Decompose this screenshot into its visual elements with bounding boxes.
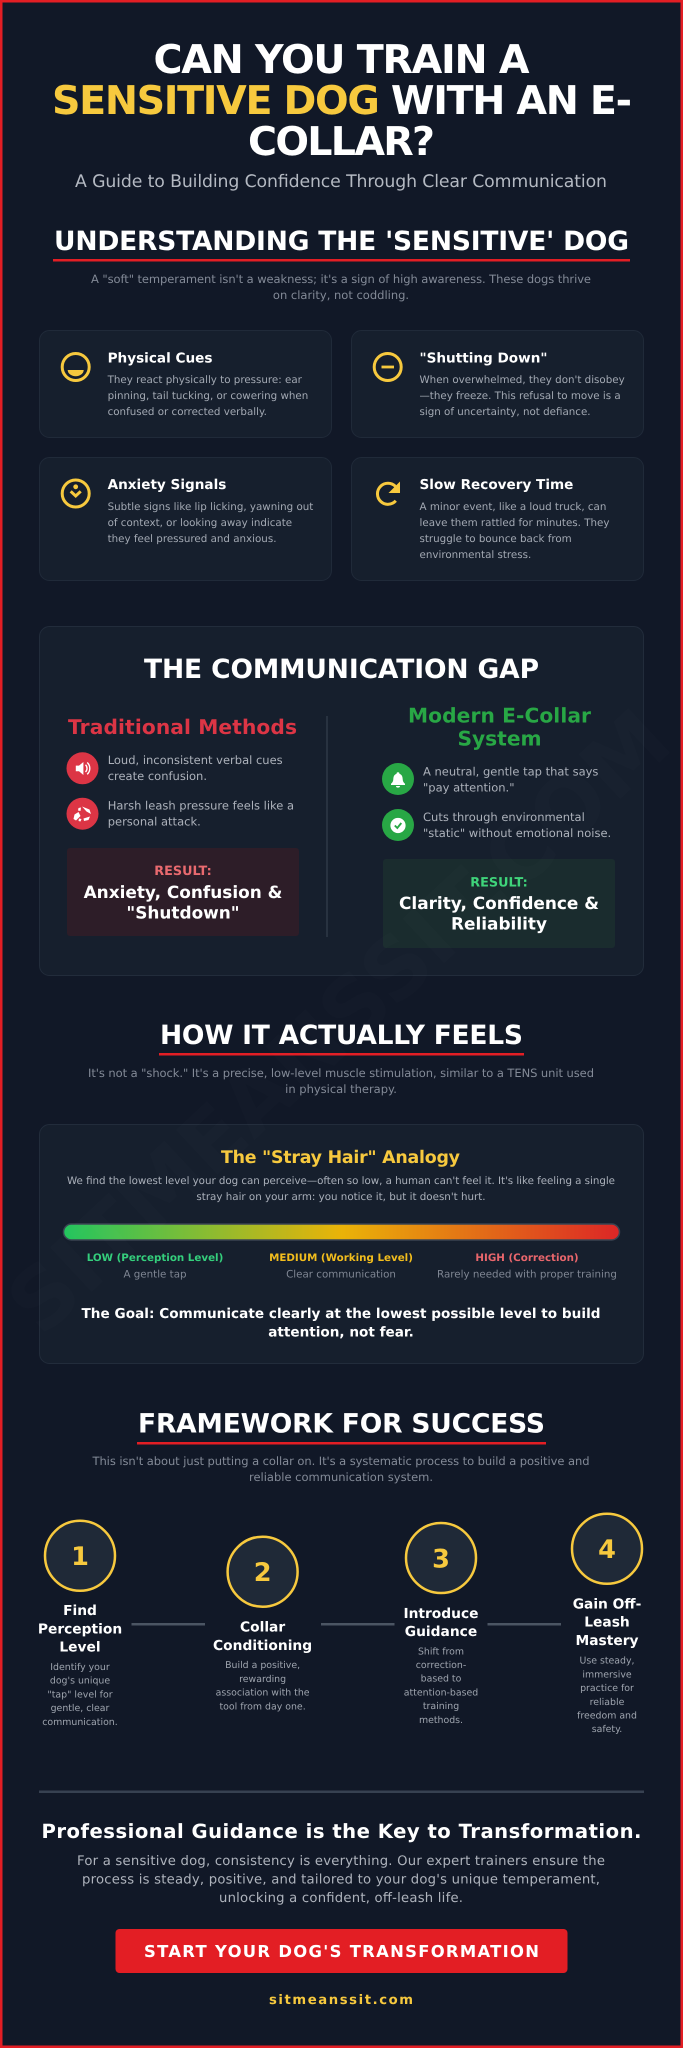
item text: create confusion. <box>108 769 207 783</box>
step heading <box>403 1606 479 1640</box>
section intro: understanding <box>91 272 591 302</box>
item text: "pay attention." <box>423 780 515 794</box>
icon: speaker <box>66 752 98 784</box>
card: shutting down <box>352 330 644 438</box>
card text: of context, or looking away indicate <box>108 517 292 529</box>
item text: "static" without emotional noise. <box>423 826 611 840</box>
connector 2 to 3 <box>321 1623 394 1626</box>
item text: personal attack. <box>108 814 201 828</box>
step heading: Collar <box>240 1620 285 1636</box>
closing text <box>77 1854 605 1906</box>
section intro: understanding: on clarity, not coddling. <box>273 288 409 302</box>
step text <box>577 1656 637 1735</box>
step text: freedom and <box>577 1710 637 1722</box>
step heading: Leash <box>584 1615 630 1631</box>
closing text: process is steady, positive, and tailored to your dog's unique temperament, <box>82 1872 600 1888</box>
step heading: Guidance <box>405 1624 477 1640</box>
level: medium <box>269 1252 413 1280</box>
number badge <box>572 1514 642 1584</box>
result box: positive: Clarity, Confidence & <box>399 893 599 913</box>
title: COLLAR? <box>248 119 435 165</box>
connector 1 to 2 <box>132 1623 205 1626</box>
result box: negative: RESULT: <box>154 864 212 879</box>
level: high: HIGH (Correction) <box>475 1252 579 1264</box>
level: medium: Clear communication <box>286 1268 396 1280</box>
number badge <box>45 1521 115 1591</box>
column divider <box>326 716 328 937</box>
card text: sign of uncertainty, not defiance. <box>420 406 591 418</box>
step 3 <box>403 1523 479 1726</box>
number badge: 4 <box>598 1535 616 1565</box>
section intro: how it feels: in physical therapy. <box>285 1082 397 1096</box>
step heading: Find <box>63 1603 97 1619</box>
step text: practice for <box>580 1683 634 1694</box>
goal statement: The Goal: Communicate clearly at the lowest possible level to build <box>82 1306 600 1322</box>
card text <box>107 374 308 418</box>
call to action button <box>116 1929 568 1973</box>
step text: gentle, clear <box>51 1703 110 1714</box>
card text: struggle to bounce back from <box>420 533 572 545</box>
card text: they feel pressured and anxious. <box>108 533 276 545</box>
icon: circle with dot and chevron <box>62 480 89 507</box>
section intro: framework <box>92 1454 590 1484</box>
result box: negative <box>67 848 299 936</box>
step heading <box>38 1603 122 1656</box>
card text: pinning, tail tucking, or cowering when <box>108 390 308 402</box>
step heading: Level <box>59 1640 101 1656</box>
step text: Identify your <box>50 1662 110 1673</box>
card text <box>420 374 625 418</box>
step text: based to <box>421 1674 462 1685</box>
step text: dog's unique <box>50 1676 110 1687</box>
card text: environmental stress. <box>420 549 531 561</box>
step text: Use steady, <box>579 1656 635 1667</box>
step text: correction- <box>416 1660 466 1671</box>
level: low: LOW (Perception Level) <box>87 1252 223 1264</box>
column heading: Traditional Methods <box>68 715 297 739</box>
icon: check badge <box>382 809 414 841</box>
card text: Subtle signs like lip licking, yawning out <box>108 501 313 513</box>
panel text: We find the lowest level your dog can perceive—often so low, a human can't feel it. It's like feeling a single <box>67 1175 615 1187</box>
card heading: Slow Recovery Time <box>420 477 573 493</box>
goal statement <box>82 1306 600 1340</box>
intensity gradient bar <box>64 1224 620 1240</box>
panel heading: THE COMMUNICATION GAP <box>144 654 539 685</box>
section intro: how it feels <box>88 1066 594 1096</box>
result box: negative: "Shutdown" <box>126 902 240 922</box>
call to action button: START YOUR DOG'S TRANSFORMATION <box>144 1942 539 1961</box>
step heading: Perception <box>38 1622 122 1638</box>
item text <box>108 798 294 828</box>
step text: tool from day one. <box>220 1701 306 1712</box>
column: modern e-collar system <box>382 704 615 948</box>
number badge: 1 <box>71 1542 89 1572</box>
step text: Shift from <box>418 1646 464 1657</box>
watermark: SITMEANSSIT.COM <box>0 690 683 1353</box>
item text: A neutral, gentle tap that says <box>423 764 598 778</box>
icon: bell <box>382 763 414 795</box>
level: low <box>87 1252 223 1280</box>
step heading <box>213 1620 312 1654</box>
card text <box>108 501 313 545</box>
column heading: System <box>457 726 542 750</box>
card text: They react physically to pressure: ear <box>107 374 303 386</box>
level: high <box>437 1252 617 1280</box>
step 2 <box>213 1537 312 1712</box>
section intro: understanding: A "soft" temperament isn't a weakness; it's a sign of high awareness. These dogs thrive <box>91 272 591 286</box>
step text: immersive <box>582 1669 632 1680</box>
step text <box>216 1660 310 1712</box>
icon: face with half disc <box>62 354 89 380</box>
panel: stray hair analogy <box>40 1124 644 1364</box>
closing text: unlocking a confident, off-leash life. <box>219 1891 463 1906</box>
goal statement: attention, not fear. <box>268 1324 414 1340</box>
level: medium: MEDIUM (Working Level) <box>269 1252 413 1264</box>
panel text <box>67 1175 615 1203</box>
closing heading: Professional Guidance is the Key to Transformation. <box>42 1820 642 1843</box>
panel text: stray hair on your arm: you notice it, but it doesn't hurt. <box>196 1191 486 1203</box>
number badge: 3 <box>432 1544 450 1574</box>
section intro: framework: reliable communication system. <box>249 1470 433 1484</box>
number badge <box>228 1537 298 1607</box>
result box: positive: Reliability <box>451 914 547 934</box>
step heading: Introduce <box>403 1606 479 1622</box>
number badge: 2 <box>254 1558 272 1588</box>
step text: rewarding <box>239 1674 286 1685</box>
card heading: "Shutting Down" <box>420 350 547 366</box>
step text: methods. <box>419 1715 463 1726</box>
card text: leave them rattled for minutes. They <box>420 517 609 529</box>
website: sitmeanssit.com <box>269 1993 413 2008</box>
card text: A minor event, like a loud truck, can <box>420 501 606 513</box>
result box: negative: Anxiety, Confusion & <box>84 882 283 902</box>
step heading: Conditioning <box>213 1638 312 1654</box>
section intro: how it feels: It's not a "shock." It's a precise, low-level muscle stimulation, similar to a TENS unit used <box>88 1066 594 1080</box>
item text <box>423 764 598 794</box>
panel heading: The "Stray Hair" Analogy <box>221 1148 461 1168</box>
card heading: Physical Cues <box>108 350 212 366</box>
step text <box>42 1662 118 1728</box>
result box: positive <box>383 859 615 948</box>
step text: training <box>423 1701 459 1712</box>
section intro: framework: This isn't about just putting a collar on. It's a systematic process to build a positive and <box>92 1454 590 1468</box>
item text: Harsh leash pressure feels like a <box>108 798 294 812</box>
step text: communication. <box>42 1717 118 1728</box>
card text: confused or corrected verbally. <box>108 406 267 418</box>
column: traditional methods <box>66 715 299 936</box>
level: high: Rarely needed with proper training <box>437 1268 617 1280</box>
subtitle: A Guide to Building Confidence Through Clear Communication <box>75 172 607 192</box>
step heading: Gain Off- <box>573 1596 641 1612</box>
icon: circle with minus <box>374 354 401 380</box>
card text: When overwhelmed, they don't disobey <box>420 374 625 386</box>
title <box>52 37 632 165</box>
panel: the communication gap <box>40 626 644 976</box>
step text: "tap" level for <box>47 1689 113 1700</box>
step text: association with the <box>216 1688 310 1699</box>
connector 3 to 4 <box>488 1623 561 1626</box>
card text: —they freeze. This refusal to move is a <box>420 390 621 402</box>
step heading: Mastery <box>575 1633 639 1649</box>
card text <box>420 501 609 561</box>
section heading: framework: FRAMEWORK FOR SUCCESS <box>138 1408 545 1440</box>
number badge <box>406 1523 476 1593</box>
column heading <box>408 704 591 750</box>
section heading: how it feels: HOW IT ACTUALLY FEELS <box>160 1020 523 1051</box>
item text <box>108 753 283 783</box>
closing text: For a sensitive dog, consistency is everything. Our expert trainers ensure the <box>77 1854 605 1869</box>
step heading <box>573 1596 641 1649</box>
section heading: understanding: UNDERSTANDING THE 'SENSITIVE' DOG <box>54 226 629 257</box>
step 1 <box>38 1521 122 1728</box>
step text: Build a positive, <box>225 1660 300 1671</box>
item text: Cuts through environmental <box>423 810 585 824</box>
step text: attention-based <box>404 1687 478 1698</box>
icon: refresh arrow <box>377 482 400 504</box>
step text: safety. <box>592 1724 622 1735</box>
card: anxiety signals <box>40 458 332 580</box>
step 4 <box>572 1514 642 1735</box>
icon: broken link <box>66 798 98 830</box>
item text <box>423 810 611 840</box>
item text: Loud, inconsistent verbal cues <box>108 753 283 767</box>
card: slow recovery time <box>352 458 644 580</box>
step text: reliable <box>590 1697 625 1708</box>
result box: positive: RESULT: <box>470 876 528 890</box>
level: low: A gentle tap <box>123 1268 187 1280</box>
column heading: Modern E-Collar <box>408 704 591 728</box>
card heading: Anxiety Signals <box>108 477 226 493</box>
step text <box>404 1646 478 1726</box>
title: SENSITIVE DOG WITH AN E- <box>52 78 632 124</box>
card: physical cues <box>40 330 332 438</box>
title: CAN YOU TRAIN A <box>154 37 530 83</box>
